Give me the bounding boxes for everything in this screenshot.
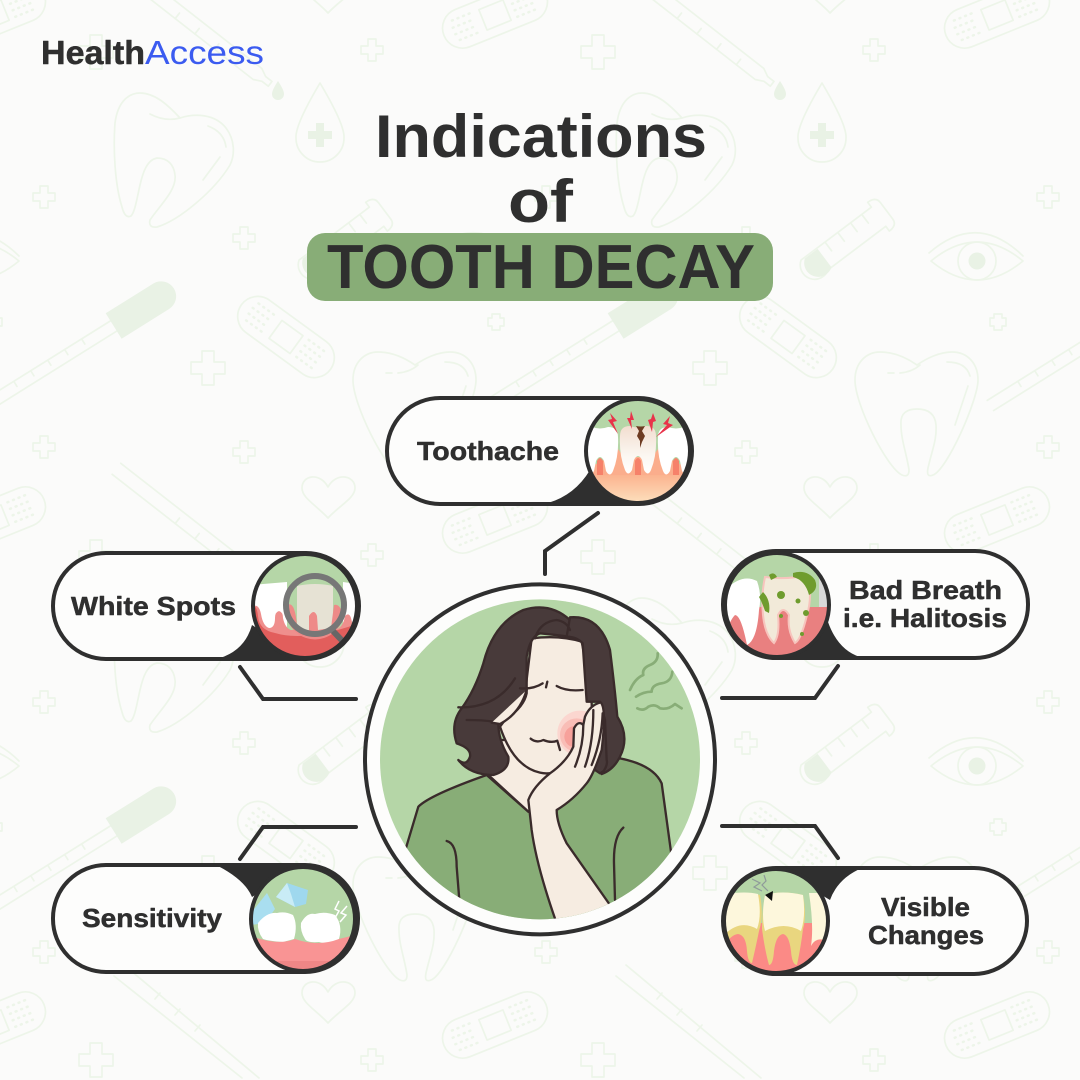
- icon: discoloured teeth: [724, 869, 828, 973]
- cheek pain glow: [558, 710, 586, 753]
- callout: sensitivity: Sensitivity: [82, 903, 223, 933]
- title: of: [508, 168, 574, 235]
- callout: toothache: [387, 398, 694, 504]
- eyes, brows, mouth: [520, 682, 583, 750]
- title highlight: tooth decay: TOOTH DECAY: [327, 233, 755, 302]
- callout: bad breath: Bad Breath: [849, 575, 1002, 605]
- callout: toothache: Toothache: [417, 436, 559, 466]
- callout: white spots: White Spots: [71, 591, 236, 621]
- central illustration: woman with toothache: [365, 584, 715, 934]
- callout: bad breath: i.e. Halitosis: [843, 603, 1007, 633]
- pain squiggles: [630, 653, 682, 710]
- callout: visible changes: [723, 868, 1027, 974]
- hair back and neck: [594, 734, 606, 774]
- title: Indications: [375, 103, 707, 170]
- connector lines: [240, 513, 838, 859]
- logo: HealthAccess: [41, 34, 264, 71]
- title: [307, 103, 773, 302]
- shirt: [403, 758, 672, 923]
- callout: sensitivity: [53, 865, 358, 972]
- icon: tooth with plaque: [725, 553, 829, 657]
- icon: cracked tooth with pain bolts: [582, 399, 694, 503]
- hand and arm: [528, 702, 617, 923]
- callout: visible changes: Changes: [868, 920, 984, 950]
- icon: magnifier over tooth: [253, 554, 357, 658]
- hair: [454, 607, 570, 775]
- callout: bad breath: [723, 551, 1028, 658]
- icon: ice and teeth: [251, 867, 355, 971]
- callout: white spots: [53, 553, 359, 659]
- callout: visible changes: Visible: [881, 892, 970, 922]
- face: [500, 637, 592, 773]
